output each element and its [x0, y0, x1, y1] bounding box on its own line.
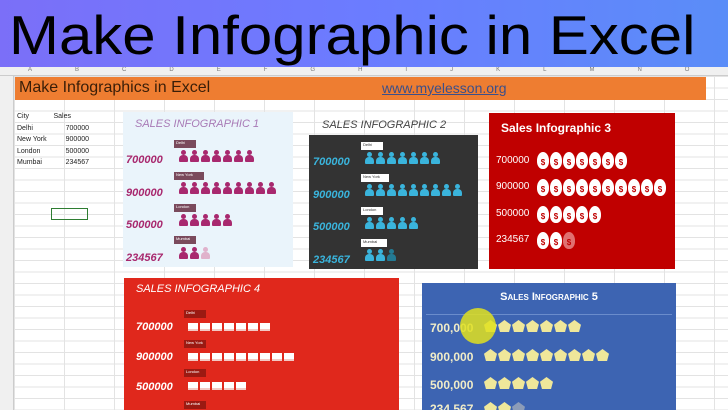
- panel 3: $: [593, 158, 597, 167]
- panel 3: $: [541, 212, 545, 221]
- panel 4: New York: [186, 340, 203, 345]
- panel 3: $: [567, 212, 571, 221]
- panel 3: 234567: [496, 234, 529, 245]
- column headers: I: [405, 67, 407, 73]
- data table: Sales: [53, 113, 71, 120]
- panel 2 title: SALES INFOGRAPHIC 2: [322, 119, 446, 131]
- column headers: L: [543, 67, 546, 73]
- column headers: K: [496, 67, 500, 73]
- data table: City: [17, 113, 29, 120]
- panel 1: [123, 112, 293, 267]
- panel 4 title: SALES INFOGRAPHIC 4: [136, 283, 260, 295]
- column headers: O: [685, 67, 689, 73]
- panel 3: $: [632, 185, 636, 194]
- column headers: J: [450, 67, 453, 73]
- data table: [17, 112, 89, 166]
- column headers: B: [75, 67, 79, 73]
- column headers: E: [217, 67, 221, 73]
- panel 3: $: [554, 158, 558, 167]
- data table: Delhi: [17, 124, 33, 132]
- panel 2: New York: [363, 174, 380, 179]
- column headers: G: [310, 67, 315, 73]
- panel 3 title: Sales Infographic 3: [501, 121, 611, 135]
- panel 5: [422, 283, 676, 410]
- panel 3: $: [606, 158, 610, 167]
- data table: London: [17, 148, 40, 154]
- panel 5: 700,000: [430, 321, 473, 335]
- panel 3: $: [580, 158, 584, 167]
- column headers: N: [637, 67, 642, 73]
- panel 3: $: [593, 212, 597, 221]
- column headers: C: [122, 67, 126, 73]
- panel 3: $: [567, 238, 571, 247]
- panel 3: $: [593, 185, 597, 194]
- panel 2: [309, 135, 478, 269]
- panel 1: Mumbai: [176, 236, 190, 241]
- panel 2: London: [363, 207, 376, 212]
- panel 4: 500000: [136, 381, 173, 393]
- panel 2: Mumbai: [363, 239, 377, 244]
- title: Make Infographic in Excel: [9, 4, 695, 66]
- panel 1: Delhi: [176, 140, 185, 145]
- data table: 500000: [66, 148, 89, 154]
- panel 3: $: [619, 185, 623, 194]
- panel 3: [489, 113, 675, 269]
- panel 5: 900,000: [430, 350, 473, 364]
- column headers: F: [264, 67, 267, 73]
- panel 3: $: [541, 238, 545, 247]
- panel 3: $: [567, 158, 571, 167]
- column headers: A: [28, 67, 32, 73]
- panel 3: $: [645, 185, 649, 194]
- panel 4: Delhi: [186, 310, 195, 315]
- panel 4: [124, 278, 399, 410]
- panel 1: 900000: [126, 187, 163, 199]
- column headers: D: [169, 67, 174, 73]
- panel 3: $: [658, 185, 662, 194]
- panel 3: $: [554, 185, 558, 194]
- title banner: [0, 0, 728, 67]
- column headers: H: [358, 67, 362, 73]
- data table: New York: [17, 136, 47, 143]
- column headers: M: [589, 67, 594, 73]
- panel 4: 900000: [136, 351, 173, 363]
- panel 3: $: [619, 158, 623, 167]
- panel 4: Mumbai: [186, 401, 200, 406]
- panel 1: 234567: [126, 252, 163, 264]
- data table: 700000: [66, 124, 89, 132]
- row numbers: [0, 76, 14, 410]
- link: www.myelesson.org: [382, 80, 506, 96]
- panel 2: 500000: [313, 221, 350, 233]
- panel 1: 700000: [126, 154, 163, 166]
- panel 3: 500000: [496, 208, 529, 219]
- data table: 900000: [66, 136, 89, 143]
- data table: Mumbai: [17, 159, 42, 166]
- orange header bar: [15, 77, 706, 100]
- panel 2: 700000: [313, 156, 350, 168]
- panel 2: 234567: [313, 254, 350, 266]
- panel 1: New York: [176, 172, 193, 177]
- panel 3: $: [606, 185, 610, 194]
- panel 3: $: [567, 185, 571, 194]
- panel 1 title: SALES INFOGRAPHIC 1: [135, 118, 259, 130]
- panel 3: $: [554, 212, 558, 221]
- panel 3: $: [541, 158, 545, 167]
- panel 4: London: [186, 369, 199, 374]
- panel 1: London: [176, 204, 189, 209]
- column headers: [0, 67, 728, 76]
- panel 2: Delhi: [363, 142, 372, 147]
- panel 3: 700000: [496, 155, 529, 166]
- panel 1: 500000: [126, 219, 163, 231]
- data table: 234567: [66, 159, 89, 166]
- selected cell: [51, 208, 88, 220]
- panel 3: 900000: [496, 181, 529, 192]
- panel 5 title: Sales Infographic 5: [500, 291, 598, 303]
- sheet heading: Make Infographics in Excel: [19, 79, 210, 96]
- panel 3: $: [580, 212, 584, 221]
- panel 3: $: [541, 185, 545, 194]
- panel 3: $: [580, 185, 584, 194]
- panel 2: 900000: [313, 189, 350, 201]
- panel 5: 500,000: [430, 378, 473, 392]
- panel 3: $: [554, 238, 558, 247]
- cursor highlight: [460, 308, 496, 344]
- panel 4: 700000: [136, 321, 173, 333]
